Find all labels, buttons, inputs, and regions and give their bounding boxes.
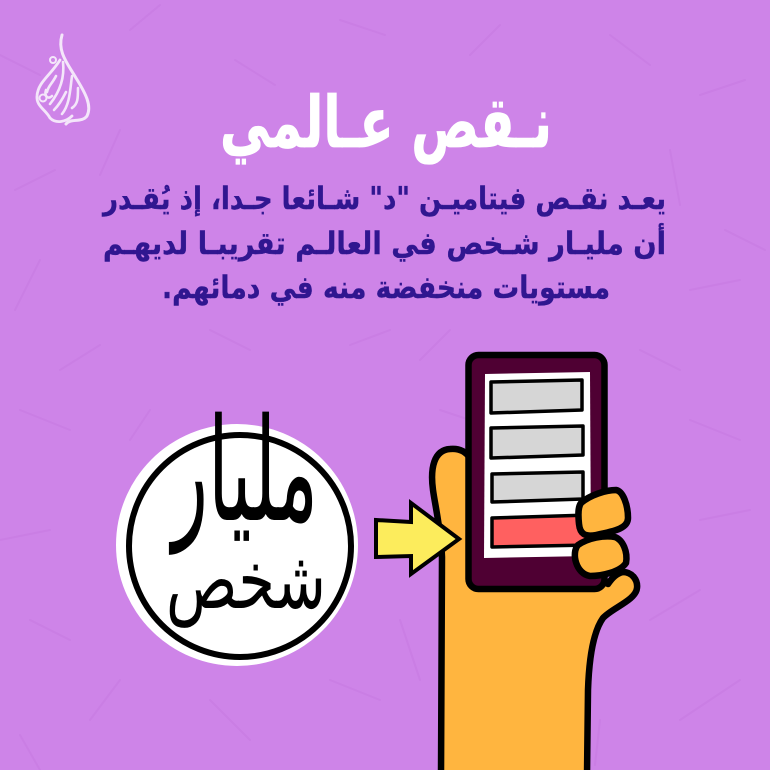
illustration: hand holding phone [432, 355, 637, 770]
arrow [376, 503, 459, 574]
lower finger [575, 536, 626, 576]
bar 1 [491, 380, 582, 413]
upper finger [578, 490, 628, 536]
paragraph line 1: يعـد نقـص فيتاميـن "د" شـائعا جـدا، إذ يُقـدر [101, 181, 666, 217]
phone screen [484, 372, 591, 558]
paragraph line 2: أن مليـار شـخص في العالـم تقريبـا لديهـم [103, 223, 666, 262]
hand [432, 449, 637, 770]
bar 4: highlighted [492, 515, 590, 547]
title: نـقص عـالمي [220, 81, 552, 165]
bar 2 [491, 426, 583, 458]
badge: one billion people [116, 388, 358, 666]
logo: Al Jazeera emblem [37, 35, 89, 124]
badge circle [116, 424, 358, 666]
phone body [468, 355, 604, 589]
intro paragraph [101, 181, 666, 306]
paragraph line 3: مستويات منخفضة منه في دمائهم. [162, 270, 610, 306]
badge text: people: شخص [166, 533, 326, 628]
bar 3 [492, 472, 583, 502]
badge text: billion: مليار [169, 388, 318, 555]
